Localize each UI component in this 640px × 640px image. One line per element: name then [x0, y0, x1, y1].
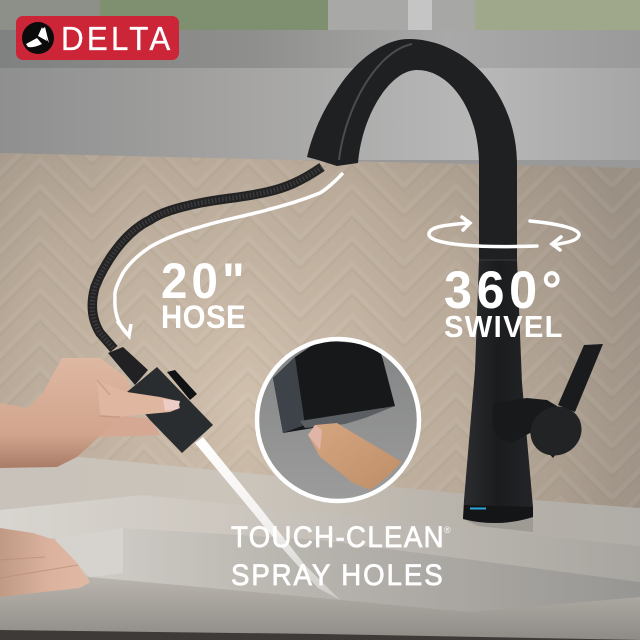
index finger	[97, 380, 180, 417]
inset finger	[308, 423, 402, 490]
faucet	[307, 39, 603, 532]
360 swivel label: 360°	[444, 260, 562, 319]
palm	[0, 358, 132, 468]
handle cap	[521, 397, 591, 465]
lever	[558, 344, 603, 412]
360 swivel label: SWIVEL	[444, 310, 562, 344]
hose	[92, 167, 322, 349]
window sill	[0, 30, 640, 68]
spout and stem	[307, 39, 517, 260]
left arrowhead	[462, 217, 470, 230]
window view at top	[0, 0, 640, 36]
faucet body	[463, 260, 533, 523]
20 inch hose label: HOSE	[161, 299, 246, 335]
fingernail	[163, 399, 180, 411]
touch-clean label: TOUCH-CLEAN	[231, 521, 444, 554]
stem seam	[479, 259, 517, 261]
hose length arrow	[115, 173, 343, 336]
20 inch hose label	[161, 254, 246, 335]
touch-clean label: SPRAY HOLES	[231, 559, 443, 592]
logo mark	[22, 22, 54, 54]
20 inch hose label: 20"	[161, 254, 245, 309]
swivel arrows	[429, 217, 579, 250]
touch-clean label: ®	[444, 525, 451, 535]
inset circle: spray holes	[257, 339, 419, 501]
spray head connector	[108, 347, 148, 385]
wall band	[0, 68, 640, 160]
inset spray holes	[300, 406, 395, 428]
spray water	[195, 437, 340, 600]
spout highlight	[339, 44, 412, 160]
lower fingers	[100, 415, 160, 437]
base indicator light	[470, 508, 486, 510]
right arc	[530, 221, 579, 245]
spray head	[127, 367, 213, 453]
base band	[463, 505, 533, 523]
inset side face	[273, 357, 305, 433]
base shadow	[463, 517, 533, 532]
handle hub	[493, 398, 580, 458]
lower hand	[0, 528, 90, 597]
spray button	[167, 370, 197, 400]
touch-clean label	[231, 521, 451, 592]
Delta logo	[16, 16, 179, 60]
arrowhead	[117, 321, 131, 336]
Delta logo: DELTA	[61, 20, 171, 57]
right arrowhead	[552, 237, 561, 250]
inset nail	[308, 425, 322, 450]
countertop and sink	[0, 455, 640, 640]
hand holding sprayer	[0, 347, 213, 468]
inset spray head	[273, 340, 395, 433]
knuckle shading	[97, 380, 120, 417]
tile backsplash	[0, 153, 640, 520]
